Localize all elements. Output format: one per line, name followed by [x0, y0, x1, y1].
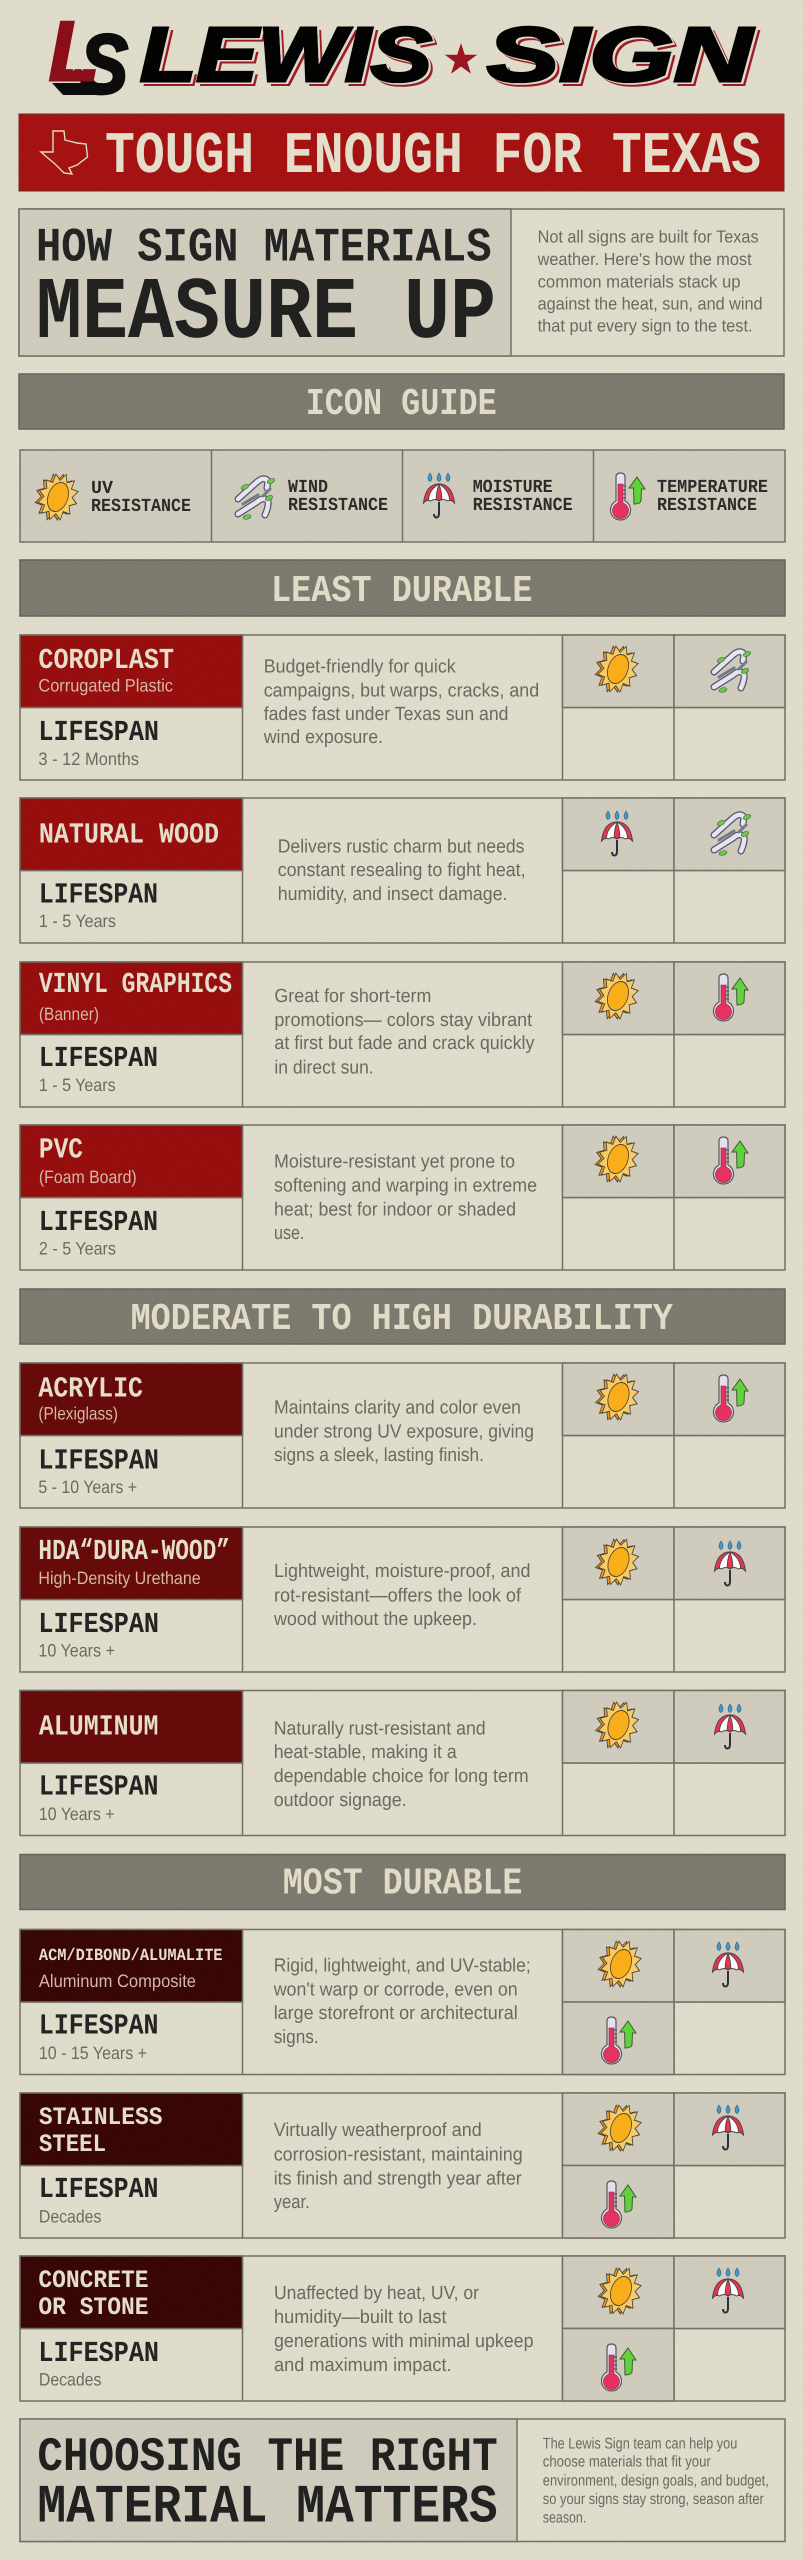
description: outdoor signage.: [274, 1790, 407, 1811]
guide: temperature resistance: RESISTANCE: [657, 495, 757, 516]
description: [273, 1956, 531, 2048]
guide: UV resistance: [29, 467, 191, 527]
name cell: COROPLAST: [38, 644, 174, 677]
description: generations with minimal upkeep: [274, 2331, 534, 2352]
description: [274, 2120, 523, 2213]
guide: temperature resistance: [610, 473, 768, 520]
lifespan: 3 - 12 Months: [38, 749, 139, 769]
description: promotions— colors stay vibrant: [274, 1010, 533, 1031]
lifespan: [39, 2173, 158, 2227]
icons: UV, moisture: [562, 1690, 785, 1763]
wordmark: SIGN: SIGN: [487, 12, 754, 98]
section header: most durable: MOST DURABLE: [283, 1863, 522, 1906]
description: humidity—built to last: [274, 2307, 447, 2328]
lifespan: LIFESPAN: [39, 879, 158, 912]
section header: moderate to high durability: [20, 1289, 785, 1344]
lifespan: [38, 2337, 159, 2390]
description: signs.: [274, 2027, 319, 2048]
description: heat-stable, making it a: [274, 1742, 457, 1763]
name cell: ALUMINUM: [39, 1710, 158, 1744]
icons: UV, moisture: [562, 1527, 785, 1600]
description: softening and warping in extreme: [274, 1176, 537, 1197]
description: [274, 1151, 537, 1244]
logo mark: LS monogram: L: [49, 4, 99, 98]
icons: UV, wind: [562, 635, 785, 708]
logo: Lewis Sign: [49, 4, 754, 111]
name cell: OR STONE: [38, 2293, 148, 2322]
description: [274, 2283, 534, 2376]
description: heat; best for indoor or shaded: [274, 1199, 516, 1220]
name cell: (Banner): [39, 1004, 99, 1024]
description: won't warp or corrode, even on: [273, 1980, 518, 2000]
icons: UV, moisture, temperature: [562, 2256, 785, 2401]
description: Moisture-resistant yet prone to: [274, 1151, 515, 1172]
row: acrylic: [20, 1363, 785, 1508]
name cell: [20, 962, 242, 1034]
description: dependable choice for long term: [274, 1766, 529, 1787]
description: [274, 1718, 529, 1811]
name cell: [20, 635, 242, 708]
guide: temperature resistance: TEMPERATURE: [657, 477, 768, 498]
lifespan: [38, 716, 159, 769]
name cell: NATURAL WOOD: [39, 819, 219, 852]
row: coroplast: [20, 635, 785, 780]
description: [274, 1397, 534, 1466]
lifespan: [39, 1206, 158, 1259]
lifespan: LIFESPAN: [39, 1206, 158, 1239]
description: wind exposure.: [263, 727, 383, 748]
icons: UV, moisture, temperature: [562, 1930, 785, 2074]
closing paragraph: choose materials that fit your: [543, 2454, 711, 2471]
name cell: [20, 798, 242, 870]
description: campaigns, but warps, cracks, and: [264, 681, 539, 702]
row: aluminum: [20, 1690, 785, 1836]
row: vinyl graphics: [20, 962, 785, 1107]
guide: wind resistance: [238, 477, 388, 520]
description: Virtually weatherproof and: [274, 2120, 482, 2141]
lifespan: [38, 1608, 159, 1660]
icons: moisture, wind: [562, 798, 785, 870]
description: Delivers rustic charm but needs: [278, 836, 524, 857]
name cell: Corrugated Plastic: [38, 676, 173, 696]
panel: main heading: [19, 209, 784, 364]
name cell: HDA“DURA-WOOD”: [38, 1535, 230, 1568]
lifespan: LIFESPAN: [39, 1042, 158, 1075]
lifespan: LIFESPAN: [38, 716, 159, 749]
wordmark: LEWIS: LEWIS: [140, 12, 432, 98]
lifespan: 5 - 10 Years +: [38, 1477, 137, 1497]
guide: UV resistance: UV: [91, 478, 114, 499]
section header: most durable: [20, 1854, 785, 1910]
description: and maximum impact.: [274, 2355, 452, 2376]
intro paragraph: [537, 227, 763, 336]
lifespan: Decades: [39, 2370, 101, 2390]
description: year.: [274, 2192, 310, 2213]
icons: UV, moisture, temperature: [562, 2093, 785, 2238]
lifespan: [39, 1042, 158, 1095]
closing title: CHOOSING THE RIGHT: [37, 2431, 498, 2485]
banner: Tough Enough for Texas: [19, 114, 784, 191]
lifespan: 10 Years +: [39, 1804, 114, 1824]
lifespan: LIFESPAN: [38, 1445, 159, 1478]
intro paragraph: weather. Here's how the most: [537, 249, 752, 269]
logo mark: LS monogram: S: [80, 17, 128, 111]
description: use.: [274, 1223, 304, 1244]
description: [274, 986, 535, 1078]
description: [263, 657, 539, 748]
name cell: STAINLESS: [39, 2103, 162, 2132]
heading line 1: HOW SIGN MATERIALS: [36, 222, 492, 276]
lifespan: LIFESPAN: [39, 1770, 158, 1804]
lifespan: Decades: [39, 2207, 101, 2227]
section header: icon guide: [19, 374, 784, 429]
row: concrete or stone: [20, 2256, 785, 2401]
section header: moderate to high durability: MODERATE TO HIGH DURABILITY: [131, 1298, 673, 1341]
row: pvc: [20, 1125, 785, 1270]
description: Budget-friendly for quick: [264, 657, 456, 678]
description: corrosion-resistant, maintaining: [274, 2144, 523, 2166]
name cell: [20, 1527, 242, 1600]
lifespan: [38, 1445, 159, 1497]
row: natural wood: [20, 798, 785, 943]
name cell: [20, 2256, 242, 2328]
name cell: STEEL: [39, 2130, 106, 2159]
row: stainless steel: [20, 2093, 785, 2238]
name cell: (Plexiglass): [38, 1404, 118, 1424]
title block: [19, 209, 511, 364]
description: fades fast under Texas sun and: [264, 704, 508, 725]
description: under strong UV exposure, giving: [274, 1421, 534, 1442]
guide: moisture resistance: RESISTANCE: [473, 495, 573, 516]
lifespan: 2 - 5 Years: [39, 1239, 116, 1259]
lifespan: LIFESPAN: [38, 2337, 159, 2370]
lifespan: LIFESPAN: [39, 2173, 158, 2206]
name cell: ACM/DIBOND/ALUMALITE: [39, 1947, 223, 1966]
closing paragraph: [543, 2435, 769, 2527]
description: [273, 1561, 530, 1630]
icons: UV, temperature: [562, 1125, 785, 1198]
description: Great for short-term: [274, 986, 431, 1007]
closing paragraph: season.: [543, 2510, 586, 2527]
description: its finish and strength year after: [274, 2168, 522, 2190]
guide: wind resistance: RESISTANCE: [288, 495, 388, 516]
description: Rigid, lightweight, and UV-stable;: [274, 1956, 531, 1976]
closing paragraph: so your signs stay strong, season after: [543, 2491, 764, 2508]
row: HDA dura-wood: [20, 1527, 785, 1672]
panel: closing message: [20, 2419, 785, 2542]
name cell: PVC: [39, 1134, 83, 1167]
icon: logo star: [445, 43, 477, 74]
intro paragraph: that put every sign to the test.: [538, 316, 753, 336]
name cell: ACRYLIC: [38, 1373, 143, 1406]
icon: Texas outline: [41, 131, 88, 174]
guide: UV resistance: RESISTANCE: [91, 496, 191, 517]
closing title: MATERIAL MATTERS: [37, 2478, 498, 2539]
description: Maintains clarity and color even: [274, 1397, 521, 1418]
name cell: (Foam Board): [39, 1167, 137, 1187]
name cell: [20, 1125, 242, 1198]
description: Unaffected by heat, UV, or: [274, 2283, 480, 2304]
guide: moisture resistance: [424, 473, 573, 518]
intro paragraph: against the heat, sun, and wind: [538, 293, 763, 313]
logo mark: LS monogram: [49, 4, 128, 111]
name cell: CONCRETE: [38, 2266, 148, 2295]
lifespan: 10 Years +: [38, 1640, 115, 1660]
lifespan: [39, 2010, 158, 2063]
name cell: VINYL GRAPHICS: [39, 968, 232, 1001]
row: ACM/Dibond/Alumalite: [20, 1930, 785, 2074]
lifespan: LIFESPAN: [38, 1608, 159, 1641]
lifespan: [39, 879, 158, 931]
icons: UV, temperature: [562, 1363, 785, 1436]
lifespan: [39, 1770, 158, 1824]
section header: icon guide: ICON GUIDE: [306, 383, 497, 426]
description: humidity, and insect damage.: [278, 884, 508, 905]
name cell: [20, 1930, 242, 2002]
description: in direct sun.: [274, 1057, 374, 1078]
description: at first but fade and crack quickly: [274, 1033, 535, 1054]
intro paragraph: common materials stack up: [538, 271, 741, 291]
closing paragraph: The Lewis Sign team can help you: [543, 2435, 737, 2452]
panel: icon guide: [20, 450, 785, 542]
description: large storefront or architectural: [274, 2003, 518, 2024]
description: Lightweight, moisture-proof, and: [274, 1561, 530, 1582]
name cell: High-Density Urethane: [38, 1568, 201, 1588]
icons: UV, temperature: [562, 962, 785, 1034]
description: wood without the upkeep.: [273, 1609, 477, 1630]
description: [278, 836, 526, 905]
intro paragraph: Not all signs are built for Texas: [538, 227, 759, 247]
description: signs a sleek, lasting finish.: [274, 1445, 484, 1466]
description: rot-resistant—offers the look of: [274, 1586, 522, 1607]
description: Naturally rust-resistant and: [274, 1718, 486, 1740]
description: constant resealing to fight heat,: [278, 860, 526, 881]
guide: wind resistance: WIND: [288, 477, 328, 498]
name cell: Aluminum Composite: [39, 1971, 196, 1991]
section header: least durable: [20, 560, 785, 616]
lifespan: 1 - 5 Years: [39, 1075, 116, 1095]
guide: moisture resistance: MOISTURE: [473, 477, 553, 498]
closing title: [20, 2419, 517, 2542]
name cell: [20, 1363, 242, 1436]
lifespan: 10 - 15 Years +: [39, 2043, 147, 2063]
name cell: [20, 2093, 242, 2166]
heading line 2: MEASURE UP: [36, 265, 496, 364]
lifespan: LIFESPAN: [39, 2010, 158, 2043]
section header: least durable: LEAST DURABLE: [271, 570, 532, 613]
name cell: [20, 1690, 242, 1763]
lifespan: 1 - 5 Years: [39, 911, 116, 931]
